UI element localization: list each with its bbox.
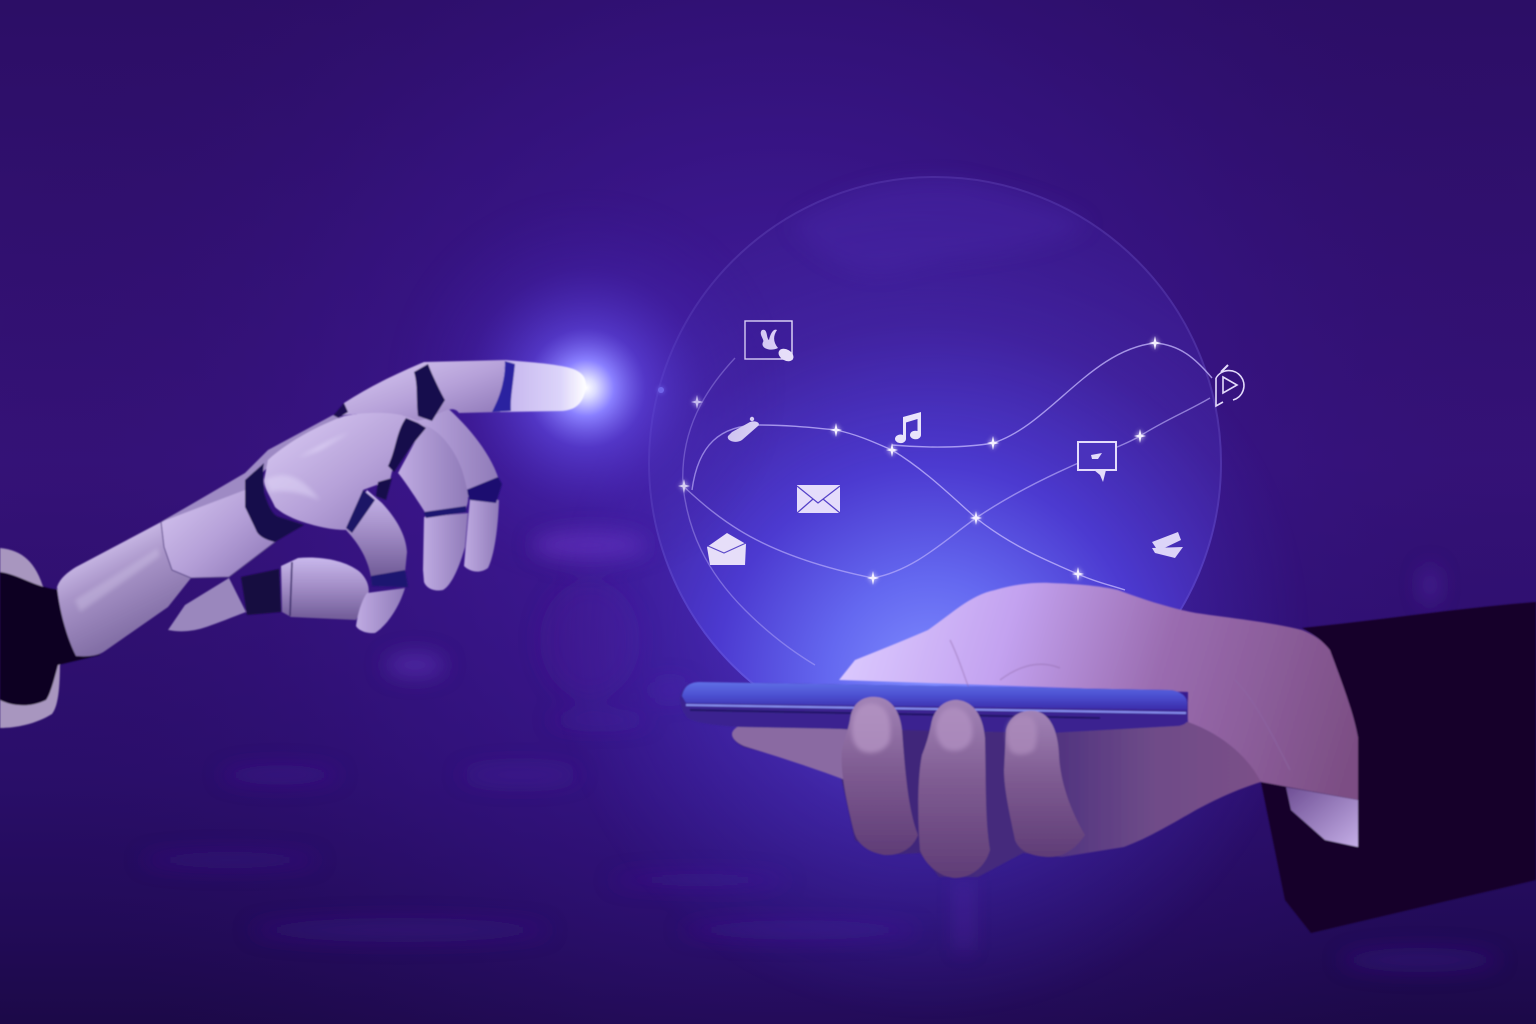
network curves inside the sphere [683, 343, 1212, 665]
icon: music note [895, 412, 921, 443]
robot arm cuff and dark wrist [0, 548, 100, 728]
robot upper hand edge [161, 415, 344, 522]
little finger under the phone [732, 724, 860, 782]
robot middle finger [398, 425, 468, 591]
robot hand specular highlights [75, 432, 350, 612]
icon: framed touch symbol [745, 321, 796, 364]
suit sleeve [1261, 602, 1536, 933]
phone light glow haze [550, 260, 1310, 1020]
background: blurred city skyline lights [140, 530, 1500, 972]
shirt cuff [1286, 787, 1358, 847]
robot thumb [168, 558, 369, 631]
hand palm and wrist [839, 583, 1358, 800]
robot forearm [57, 522, 191, 656]
robot curled pointer finger [346, 490, 408, 633]
icon: pencil [728, 417, 759, 442]
hand fingers [842, 697, 1085, 878]
robot arm [0, 360, 586, 728]
robot hand back plate [161, 475, 275, 578]
smartphone [680, 682, 1188, 733]
icon: play with circular arrows [1216, 365, 1244, 406]
icon: closed envelope [797, 485, 840, 513]
hand underside behind the fingers [732, 722, 1261, 877]
icon: open envelope [707, 533, 746, 565]
robot joint bands [245, 418, 426, 542]
human hand and phone [680, 583, 1536, 933]
icon: speech bubble video [1078, 442, 1116, 482]
fingertip light glow [386, 188, 786, 588]
hand palm creases [950, 640, 1290, 770]
robot knuckle mass [264, 413, 424, 530]
robot back fingers [410, 405, 502, 572]
network sparkle nodes [658, 336, 1161, 585]
icon: open folder pieces [1152, 532, 1183, 558]
holographic globe sphere [648, 176, 1222, 750]
robot index finger [333, 360, 586, 421]
